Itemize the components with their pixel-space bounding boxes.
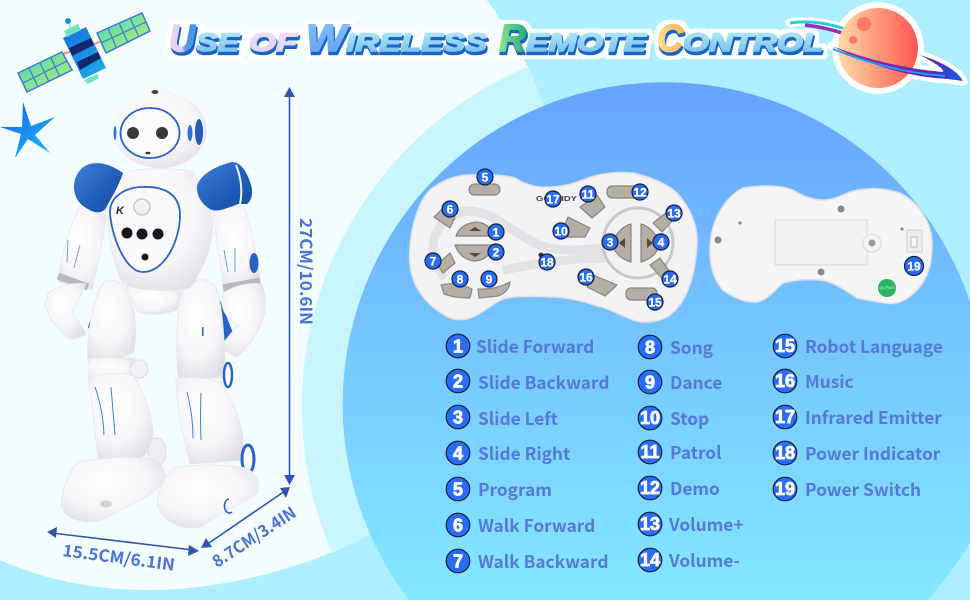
remote logo: GO MIDY <box>536 196 577 203</box>
remote number markers: 1 <box>493 226 500 240</box>
item 7: 7 <box>453 552 463 572</box>
item 18: Power Indicator <box>805 440 941 465</box>
title: W <box>306 18 349 60</box>
item 10 <box>638 405 709 430</box>
item 17: Infrared Emitter <box>805 404 942 429</box>
robot feet <box>61 457 258 528</box>
back body <box>710 186 932 304</box>
remote dial <box>603 208 673 278</box>
remote number markers: 11 <box>582 188 595 202</box>
item 6: Walk Forward <box>478 512 595 537</box>
item 3: 3 <box>453 408 463 428</box>
item 1: Slide Forward <box>476 333 594 358</box>
item 12: 12 <box>640 478 660 498</box>
item 13: Volume+ <box>668 511 744 536</box>
icon: blue star <box>0 102 55 158</box>
remote number markers: 5 <box>482 170 489 184</box>
title: IRELESS <box>346 29 487 57</box>
item 1: 1 <box>453 336 463 356</box>
depth arrow <box>201 487 290 548</box>
legend column 2 <box>638 334 744 572</box>
item 14: Volume- <box>668 547 740 572</box>
remote number markers: 15 <box>648 296 662 310</box>
item 9 <box>638 369 722 394</box>
robot head <box>113 88 207 168</box>
item 5: 5 <box>453 480 463 500</box>
item 2: Slide Backward <box>478 369 609 394</box>
QC pass sticker: QC PASS <box>879 286 895 290</box>
item 19: Power Switch <box>805 476 921 501</box>
remote control back <box>710 186 932 304</box>
depth label: 8.7CM/3.4IN <box>207 500 300 572</box>
item 12: Demo <box>670 475 720 500</box>
remote number markers <box>425 169 682 310</box>
height arrow <box>284 87 295 485</box>
robot wrist dot <box>250 253 258 273</box>
robot right arm <box>213 206 261 291</box>
item 9: Dance <box>670 369 722 394</box>
power indicator led <box>538 252 544 258</box>
item 16: 16 <box>775 371 795 391</box>
item 8 <box>638 334 714 359</box>
item 10: 10 <box>640 408 660 428</box>
item 17: 17 <box>775 407 795 427</box>
remote number markers: 9 <box>486 272 493 286</box>
marker 19 <box>904 256 924 276</box>
robot shoulders <box>74 162 252 212</box>
item 15: Robot Language <box>805 333 943 358</box>
item 15: 15 <box>775 336 795 356</box>
robot chest panel: K <box>116 205 125 217</box>
remote number markers: 12 <box>633 186 647 200</box>
robot left arm <box>58 205 106 290</box>
remote number markers: 6 <box>447 202 454 216</box>
robot pelvis <box>126 285 182 314</box>
QC pass sticker <box>878 279 896 297</box>
width label: 15.5CM/6.1IN <box>61 537 177 576</box>
height label: 27CM/10.6IN <box>295 218 319 325</box>
remote number markers: 18 <box>540 256 554 270</box>
item 13: 13 <box>640 514 660 534</box>
title: EMOTE <box>526 29 648 57</box>
item 16: Music <box>805 368 854 393</box>
item 8: Song <box>670 334 714 359</box>
title <box>169 18 823 60</box>
remote number markers: 14 <box>663 272 677 286</box>
remote number markers: 2 <box>493 246 500 260</box>
title: ONTROL <box>683 29 823 57</box>
robot lower legs <box>88 358 254 473</box>
robot chest panel <box>110 187 180 272</box>
title: SE <box>196 29 241 57</box>
title: R <box>499 18 527 60</box>
item 12 <box>638 475 720 500</box>
screws <box>714 206 904 276</box>
remote number markers: 8 <box>457 272 464 286</box>
remote control front <box>410 169 697 322</box>
marker 19: 19 <box>907 260 921 274</box>
item 8: 8 <box>645 338 655 358</box>
item 4: Slide Right <box>478 440 570 465</box>
item 11: 11 <box>640 442 660 462</box>
item 11 <box>638 439 722 464</box>
item 9: 9 <box>645 372 655 392</box>
item 3: Slide Left <box>478 405 558 430</box>
robot bracelets <box>58 276 260 288</box>
remote silver band <box>433 211 605 278</box>
remote body <box>410 173 697 322</box>
remote number markers: 10 <box>554 224 568 238</box>
remote number markers: 7 <box>430 254 437 268</box>
item 14 <box>638 547 740 572</box>
width arrow <box>47 527 199 556</box>
power switch <box>907 230 922 252</box>
robot torso <box>107 169 213 291</box>
legend column 3 <box>773 333 943 501</box>
item 11: Patrol <box>670 439 722 464</box>
robot upper legs <box>88 280 233 378</box>
remote number markers: 16 <box>579 270 593 284</box>
battery cover <box>775 220 881 265</box>
robot <box>45 88 265 528</box>
remote number markers: 4 <box>658 236 665 250</box>
legend column 1 <box>446 333 609 573</box>
title: OF <box>249 29 298 57</box>
item 16 <box>773 368 854 393</box>
item 7: Walk Backward <box>478 548 608 573</box>
remote buttons <box>434 184 673 300</box>
remote number markers: 13 <box>667 206 681 220</box>
item 10: Stop <box>670 405 709 430</box>
item 2: 2 <box>453 372 463 392</box>
icon: planet <box>790 2 963 94</box>
item 6: 6 <box>453 516 463 536</box>
remote number markers: 17 <box>546 192 560 206</box>
item 5: Program <box>478 476 552 501</box>
item 4: 4 <box>453 444 463 464</box>
title: U <box>169 18 196 60</box>
remote number markers: 3 <box>607 236 614 250</box>
item 18: 18 <box>775 443 795 463</box>
robot hands <box>45 283 265 357</box>
item 5 <box>446 476 552 501</box>
icon: satellite <box>18 13 150 92</box>
item 19: 19 <box>775 479 795 499</box>
item 14: 14 <box>640 550 660 570</box>
robot forearm detail <box>67 240 235 272</box>
title: C <box>657 18 684 60</box>
